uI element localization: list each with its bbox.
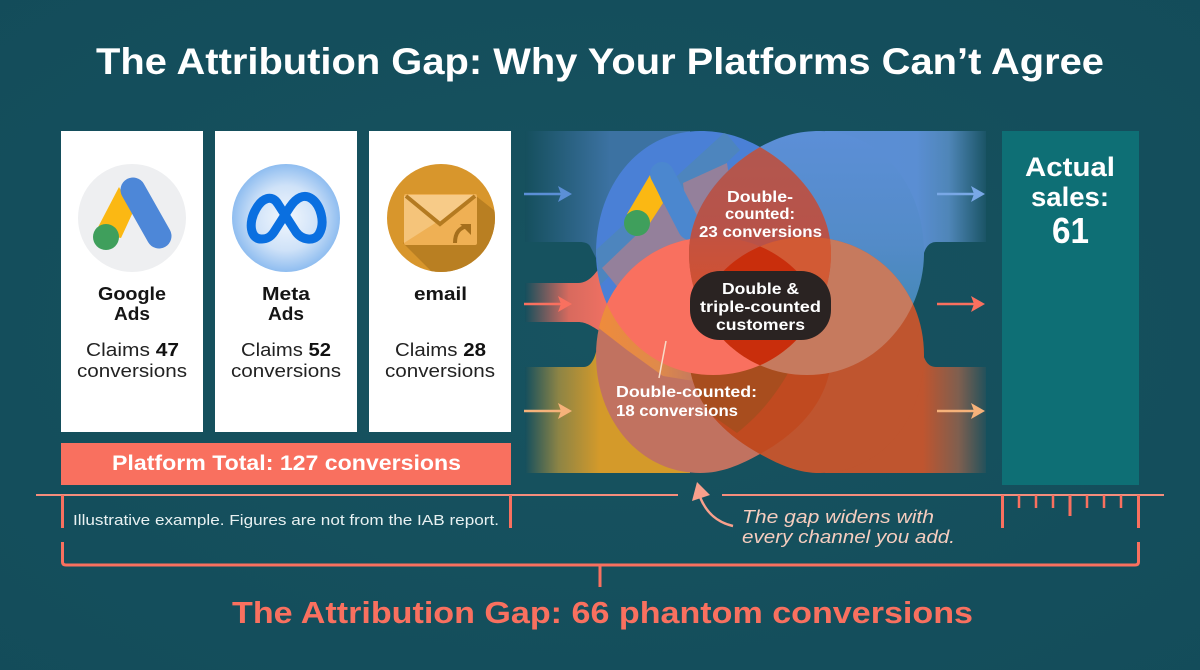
text: Google Ads claim: conversions bbox=[77, 361, 187, 381]
panel: actual sales bbox=[1002, 131, 1139, 485]
venn lens: left coral bbox=[607, 239, 760, 375]
venn circle: top left blue bbox=[596, 131, 760, 304]
icon: Meta logo bbox=[232, 164, 340, 272]
callout: double and triple-counted customers: Double & bbox=[722, 281, 799, 298]
panel: email card bbox=[369, 131, 511, 432]
venn overlap: top double-counted bbox=[689, 147, 831, 366]
text: Meta Ads claim: Claims 52 bbox=[241, 340, 331, 360]
arrows: right outflow bbox=[937, 186, 985, 419]
flow band: blue left bbox=[525, 131, 690, 258]
text: Google Ads name: Google bbox=[98, 283, 166, 304]
text: Meta Ads name: Meta bbox=[262, 283, 311, 304]
text: top overlap label bbox=[699, 189, 822, 241]
callout: gap widens: every channel you add. bbox=[742, 527, 955, 547]
panel: actual sales: sales: bbox=[1031, 182, 1109, 212]
panel: actual sales: 61 bbox=[1052, 210, 1089, 251]
text: Google Ads claim bbox=[77, 340, 187, 381]
flow band: coral left bbox=[525, 262, 640, 334]
text: Meta Ads claim bbox=[231, 340, 341, 381]
icon: faded Google Ads logo bbox=[624, 174, 690, 236]
flow band: blue right bbox=[825, 131, 986, 306]
gap headline: The Attribution Gap: 66 phantom conversions bbox=[232, 595, 973, 630]
venn overlap: bottom double-counted bbox=[690, 366, 829, 454]
text: email name: email bbox=[414, 283, 467, 304]
callout: double and triple-counted customers bbox=[690, 271, 831, 340]
platform total bar bbox=[61, 443, 511, 485]
flow band: orange right bbox=[825, 350, 986, 473]
venn lens: right pale coral bbox=[760, 239, 913, 375]
panel: Google Ads card bbox=[61, 131, 203, 432]
text: email claim bbox=[385, 340, 495, 381]
callout: gap widens bbox=[742, 507, 955, 547]
icon: Google Ads logo bbox=[78, 164, 186, 272]
venn circle: top right blue bbox=[697, 131, 924, 304]
icon: email envelope bbox=[387, 164, 495, 272]
text: Meta Ads name: Ads bbox=[268, 303, 304, 324]
callout: double and triple-counted customers: triple-counted bbox=[700, 299, 821, 316]
divider ruler bbox=[36, 495, 1164, 528]
text: Google Ads claim: Claims 47 bbox=[86, 340, 179, 360]
flow band: gold left bbox=[525, 352, 690, 473]
pointer line bbox=[659, 341, 666, 378]
text: email claim: Claims 28 bbox=[395, 340, 486, 360]
text: top overlap label: Double- bbox=[727, 189, 793, 206]
text: top overlap label: counted: bbox=[725, 206, 795, 223]
text: bottom overlap label bbox=[616, 384, 757, 420]
bracket bbox=[62, 542, 1138, 587]
arrows: left inflow bbox=[524, 186, 572, 419]
disclaimer note: Illustrative example. Figures are not from the IAB report. bbox=[73, 512, 499, 529]
venn diagram with flows bbox=[525, 125, 986, 480]
venn circle: bottom left bbox=[596, 239, 760, 473]
text: Google Ads name bbox=[98, 283, 166, 324]
text: bottom overlap label: 18 conversions bbox=[616, 403, 738, 420]
panel: actual sales: Actual bbox=[1025, 152, 1115, 182]
platform total bar: Platform Total: 127 conversions bbox=[112, 452, 461, 475]
callout: double and triple-counted customers: customers bbox=[716, 317, 805, 334]
venn circle: bottom right bbox=[712, 239, 924, 473]
text: top overlap label: 23 conversions bbox=[699, 224, 822, 241]
panel: Meta Ads card bbox=[215, 131, 357, 432]
text: Meta Ads claim: conversions bbox=[231, 361, 341, 381]
text: Google Ads name: Ads bbox=[114, 303, 150, 324]
text: Meta Ads name bbox=[262, 283, 311, 324]
callout: gap widens: The gap widens with bbox=[742, 507, 934, 527]
text: email claim: conversions bbox=[385, 361, 495, 381]
title: The Attribution Gap: Why Your Platforms Can’t Agree bbox=[96, 41, 1104, 82]
arrow: curved gap pointer bbox=[692, 482, 733, 526]
text: bottom overlap label: Double-counted: bbox=[616, 384, 757, 401]
